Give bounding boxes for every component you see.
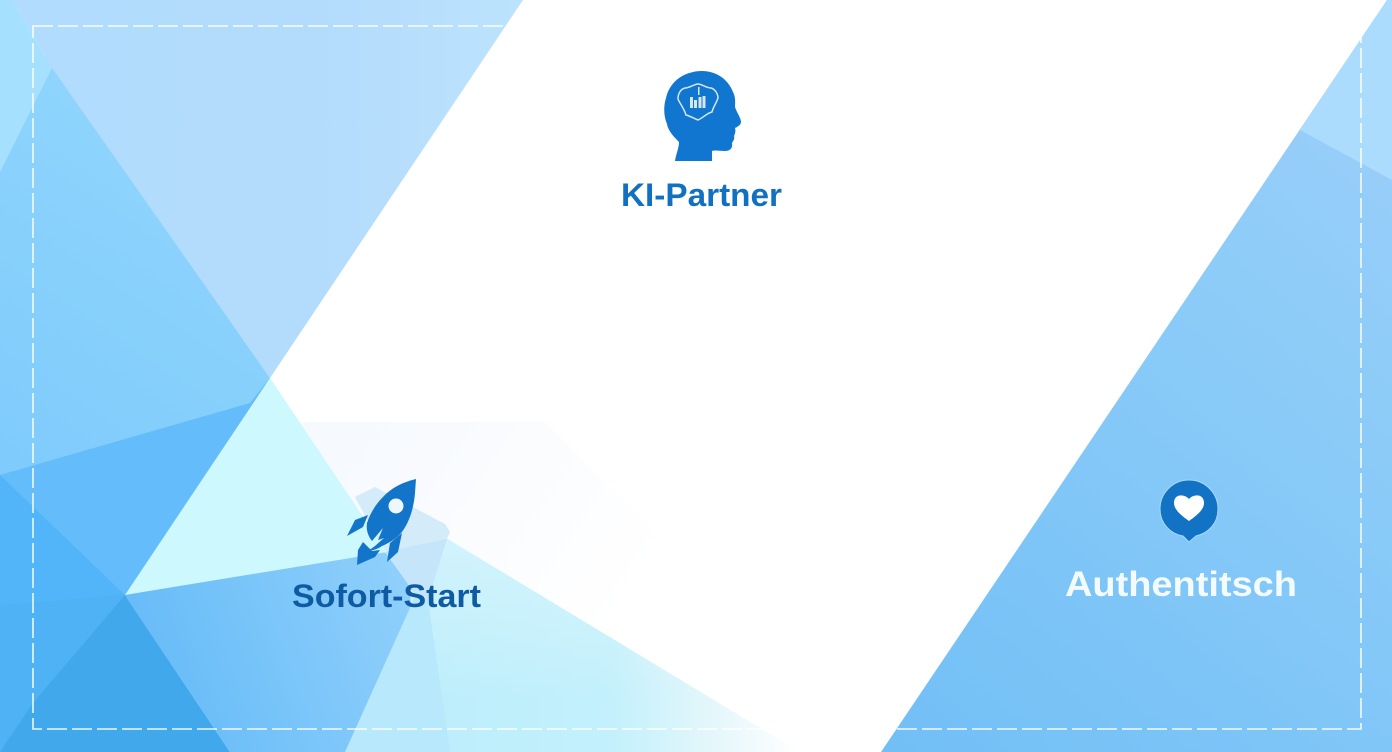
icon: head with brain chart [664,71,741,161]
heading: KI-Partner: KI-Partner [621,177,782,213]
icon: rocket [347,479,416,565]
heading: Sofort-Start: Sofort-Start [292,578,481,614]
icon: speech bubble with heart [1160,480,1218,542]
heading: Authentitsch: Authentitsch [1065,565,1297,604]
